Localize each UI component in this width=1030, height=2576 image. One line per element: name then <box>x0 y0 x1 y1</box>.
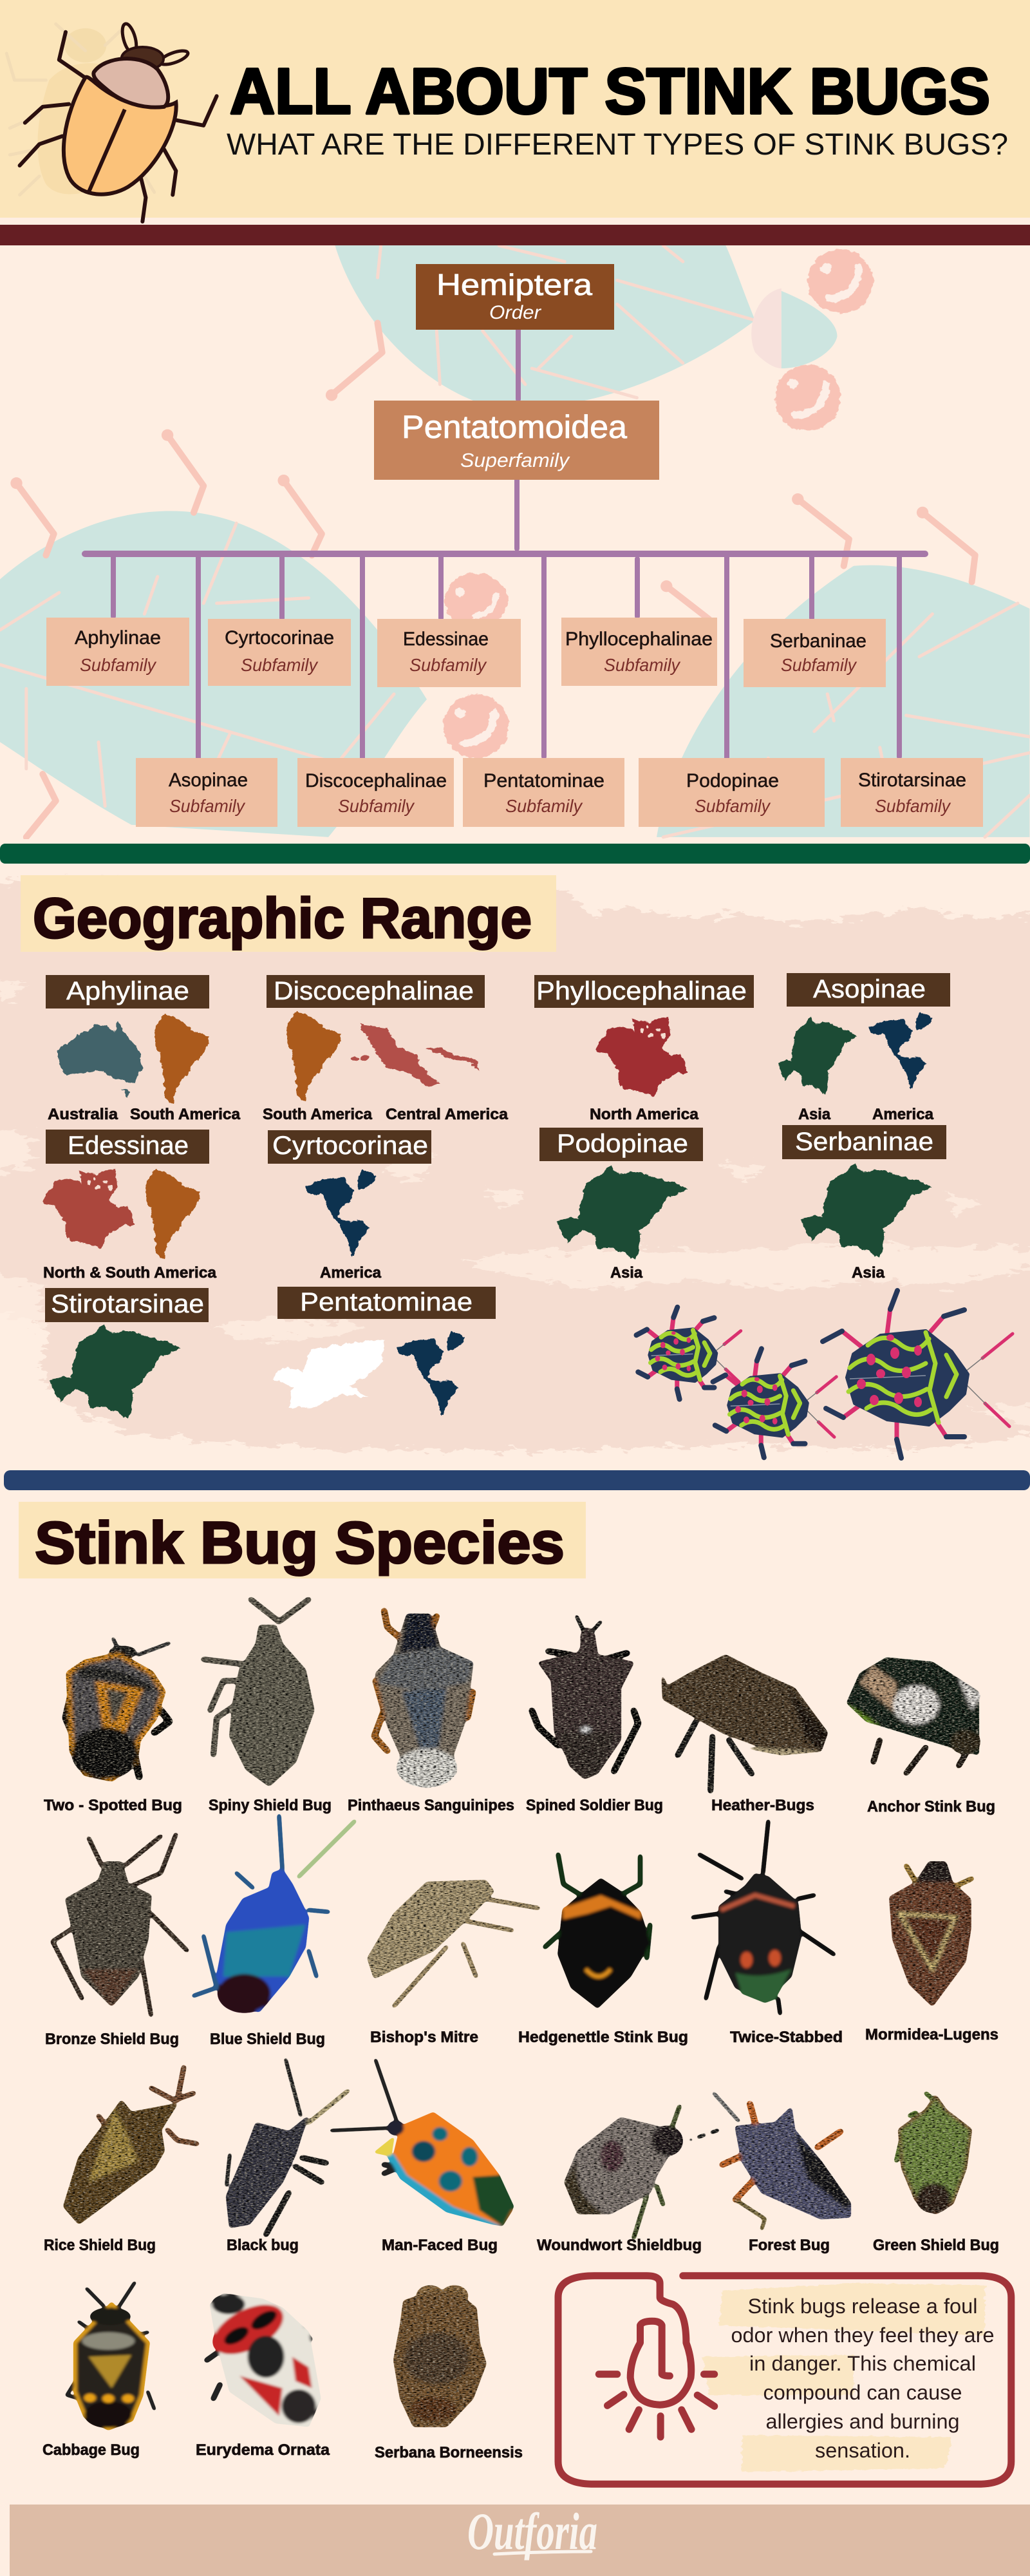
row three labels: Man-Faced Bug <box>382 2237 498 2254</box>
range card: Stirotarsinae: Stirotarsinae <box>51 1290 204 1318</box>
row one labels: Spined Soldier Bug <box>526 1797 663 1814</box>
illustrated beetles <box>636 1291 1013 1458</box>
map: America <box>306 1170 376 1258</box>
map: Australia <box>57 1021 142 1097</box>
map: Asia <box>778 1017 857 1095</box>
subfamily node: Asopinae <box>136 758 277 827</box>
leaf: small right <box>751 289 837 368</box>
icon: small beetle <box>636 1307 741 1399</box>
subfamily node: Podopinae <box>639 758 825 827</box>
bug: Woundwort Shieldbug <box>565 2106 719 2238</box>
bug: Forest <box>714 2093 850 2230</box>
background leaves and berries behind family tree <box>0 245 1029 837</box>
range card: Stirotarsinae <box>45 1288 209 1419</box>
row four labels: Eurydema Ornata <box>196 2441 330 2459</box>
captions <box>798 1106 934 1123</box>
range card: Phyllocephalinae: Phyllocephalinae <box>536 977 747 1005</box>
heading: Stink Bug Species: Stink Bug Species <box>35 1510 565 1576</box>
range card: Cyrtocorinae: Cyrtocorinae <box>272 1132 428 1160</box>
map: South America <box>145 1170 201 1259</box>
bug: Bronze Shield <box>53 1834 187 2015</box>
pink branches <box>10 323 975 837</box>
bug: Man-Faced <box>332 2060 514 2226</box>
subfamily node: Aphylinae <box>46 618 189 686</box>
range card: Edessinae: Edessinae <box>68 1132 189 1160</box>
row three labels: Green Shield Bug <box>873 2237 999 2254</box>
subfamily node: Serbaninae: Serbaninae <box>770 630 866 652</box>
range card: Podopinae: Podopinae <box>557 1130 688 1158</box>
tree node: Pentatomoidea superfamily: Superfamily <box>460 449 571 471</box>
subfamily node: Asopinae: Asopinae <box>169 770 248 791</box>
row one labels: Spiny Shield Bug <box>209 1797 332 1814</box>
range card: Cyrtocorinae <box>268 1130 431 1282</box>
captions: America <box>872 1106 934 1123</box>
subtitle: WHAT ARE THE DIFFERENT TYPES OF STINK BUGS? <box>227 127 1008 161</box>
species photos: rows one and two <box>53 1600 980 2015</box>
map: South America <box>154 1015 211 1104</box>
bug: Black <box>227 2060 348 2235</box>
subfamily node: Edessinae: Edessinae <box>403 629 489 650</box>
range card: Discocephalinae <box>263 975 509 1123</box>
captions <box>48 1106 241 1123</box>
subfamily node: Discocephalinae: Subfamily <box>338 796 415 816</box>
tree node: Pentatomoidea superfamily: Pentatomoidea <box>402 409 627 445</box>
bug: Heather <box>662 1655 827 1791</box>
map: Central America <box>352 1024 478 1087</box>
subfamily node: Asopinae: Subfamily <box>169 796 246 816</box>
heading: Geographic Range: Geographic Range <box>33 886 532 950</box>
row one labels: Pinthaeus Sanguinipes <box>348 1797 514 1814</box>
subfamily node: Stirotarsinae <box>841 758 983 827</box>
row two labels: Blue Shield Bug <box>210 2031 325 2048</box>
captions: Asia <box>798 1106 831 1123</box>
range card: Discocephalinae: Discocephalinae <box>274 977 474 1005</box>
map: Asia <box>557 1166 688 1260</box>
leaf: top centre <box>335 245 755 408</box>
row one labels: Heather-Bugs <box>711 1797 814 1814</box>
row two labels: Bronze Shield Bug <box>45 2031 179 2048</box>
row four labels: Cabbage Bug <box>42 2441 140 2459</box>
species captions <box>42 1797 999 2461</box>
subfamily node: Pentatominae <box>463 758 624 827</box>
leaf: bottom right <box>657 565 1029 837</box>
callout text: compound can cause <box>763 2381 962 2404</box>
subfamily node: Aphylinae: Aphylinae <box>75 627 161 649</box>
bug: Spiny Shield <box>203 1600 314 1786</box>
bug: Anchor <box>847 1658 980 1773</box>
range card: Aphylinae <box>46 975 241 1123</box>
subfamily node: Podopinae: Podopinae <box>686 770 779 791</box>
subfamily node: Phyllocephalinae: Phyllocephalinae <box>565 629 713 650</box>
bug: Eurydema Ornata <box>199 2294 321 2427</box>
map: North America <box>595 1017 689 1097</box>
icon: medium beetle <box>713 1349 836 1457</box>
row four labels: Serbana Borneensis <box>375 2444 523 2461</box>
row two labels: Mormidea-Lugens <box>865 2026 998 2043</box>
subfamily node: Edessinae: Subfamily <box>409 655 487 675</box>
callout brush highlight <box>702 2284 985 2472</box>
callout text <box>731 2295 994 2462</box>
map: America <box>869 1012 932 1090</box>
caption: America <box>320 1264 382 1282</box>
range card: Aphylinae: Aphylinae <box>66 977 189 1005</box>
range card: Pentatominae: Pentatominae <box>300 1288 473 1316</box>
callout text: odor when they feel they are <box>731 2324 994 2347</box>
subfamily node: Aphylinae: Subfamily <box>80 655 157 675</box>
leaf: bottom left <box>0 511 427 837</box>
subfamily node: Serbaninae <box>744 619 886 687</box>
row one labels: Anchor Stink Bug <box>867 1798 995 1815</box>
bug: Cabbage <box>67 2283 154 2429</box>
logo: Outforia: Outforia <box>467 2502 597 2561</box>
green divider band <box>0 844 1030 864</box>
row two labels: Bishop's Mitre <box>370 2029 478 2046</box>
icon: large beetle <box>823 1291 1013 1458</box>
tree node: Hemiptera order: Hemiptera <box>436 268 592 301</box>
row three labels: Woundwort Shieldbug <box>537 2237 702 2254</box>
bug: Pinthaeus Sanguinipes <box>374 1611 473 1788</box>
captions: Australia <box>48 1106 118 1123</box>
bug: Twice-Stabbed <box>693 1821 834 2014</box>
subfamily node: Stirotarsinae: Subfamily <box>875 796 951 816</box>
subfamily node: Cyrtocorinae <box>208 619 351 686</box>
row three labels: Black bug <box>227 2237 299 2254</box>
range card: Pentatominae <box>272 1287 496 1417</box>
captions: Central America <box>386 1106 509 1123</box>
range card: Edessinae <box>42 1130 217 1282</box>
bug: Two-Spotted <box>66 1638 169 1779</box>
dark red divider band <box>0 225 1030 245</box>
map: Asia <box>50 1325 181 1419</box>
map: Asia <box>801 1164 932 1258</box>
range card: Serbaninae: Serbaninae <box>795 1128 933 1156</box>
bug: Bishop's Mitre <box>368 1880 538 2006</box>
icon: beetle <box>20 23 217 222</box>
bug: Blue Shield <box>194 1815 355 2012</box>
caption: North & South America <box>43 1264 217 1282</box>
bug: Serbana Borneensis <box>394 2286 486 2427</box>
row one labels <box>44 1797 995 1815</box>
row four labels <box>42 2441 523 2461</box>
map: South America <box>286 1012 342 1101</box>
range card: Serbaninae <box>782 1125 946 1282</box>
map: America <box>397 1331 465 1417</box>
map: Europe <box>272 1340 384 1408</box>
subfamily node: Discocephalinae <box>297 758 454 827</box>
berries <box>443 249 874 758</box>
title: ALL ABOUT STINK BUGS <box>230 55 990 128</box>
range card: Podopinae <box>539 1128 703 1282</box>
caption: North America <box>590 1106 699 1123</box>
row three labels: Rice Shield Bug <box>44 2237 156 2254</box>
subfamily node: Cyrtocorinae: Subfamily <box>241 655 319 675</box>
header banner <box>0 0 1030 222</box>
bug: Green Shield <box>896 2093 971 2213</box>
subfamily node: Serbaninae: Subfamily <box>781 655 857 675</box>
callout text: allergies and burning <box>766 2410 959 2433</box>
caption: Asia <box>610 1264 643 1282</box>
footer band <box>10 2502 1030 2576</box>
callout text: sensation. <box>815 2439 910 2462</box>
row two labels: Twice-Stabbed <box>730 2029 843 2046</box>
range card: Asopinae <box>778 973 950 1123</box>
callout text: in danger. This chemical <box>749 2352 976 2375</box>
subfamily node: Discocephalinae: Discocephalinae <box>305 770 447 791</box>
callout frame and lightbulb icon <box>558 2276 1011 2484</box>
subfamily node: Stirotarsinae: Stirotarsinae <box>858 770 966 791</box>
captions: South America <box>263 1106 373 1123</box>
tree node: Pentatomoidea superfamily <box>374 401 659 480</box>
family tree connectors <box>85 330 925 758</box>
tree node: Hemiptera order <box>416 264 614 330</box>
brushed background for geographic range <box>0 880 1030 1452</box>
captions: South America <box>130 1106 241 1123</box>
row two labels: Hedgenettle Stink Bug <box>518 2029 688 2046</box>
range card: Phyllocephalinae <box>534 975 754 1123</box>
row one labels: Two - Spotted Bug <box>44 1797 182 1814</box>
subfamily node: Podopinae: Subfamily <box>695 796 771 816</box>
bug: Hedgenettle <box>545 1855 650 2008</box>
subfamily node: Phyllocephalinae <box>561 618 717 686</box>
callout: stink bug odor fact <box>558 2276 1011 2484</box>
logo: Outforia <box>467 2502 597 2561</box>
bug: Mormidea-Lugens <box>890 1862 972 2006</box>
species photos: rows three and four <box>64 2060 971 2429</box>
subfamily node: Edessinae <box>377 619 521 687</box>
map: North America <box>42 1169 136 1249</box>
caption: Asia <box>852 1264 885 1282</box>
captions <box>263 1106 509 1123</box>
subfamily node: Pentatominae: Subfamily <box>505 796 583 816</box>
row three labels <box>44 2237 999 2254</box>
tree node: Hemiptera order: Order <box>489 302 541 323</box>
subfamily node: Cyrtocorinae: Cyrtocorinae <box>225 627 334 649</box>
blue divider band <box>4 1470 1030 1490</box>
row two labels <box>45 2026 998 2048</box>
subfamily node: Phyllocephalinae: Subfamily <box>604 655 681 675</box>
bug: Rice Shield <box>64 2067 197 2224</box>
subfamily node: Pentatominae: Pentatominae <box>483 770 604 791</box>
range card: Asopinae: Asopinae <box>813 975 926 1003</box>
bug: Spined Soldier <box>532 1616 638 1779</box>
icon: faded ghost bug <box>6 24 154 195</box>
callout text: Stink bugs release a foul <box>748 2295 977 2318</box>
row three labels: Forest Bug <box>749 2237 830 2254</box>
